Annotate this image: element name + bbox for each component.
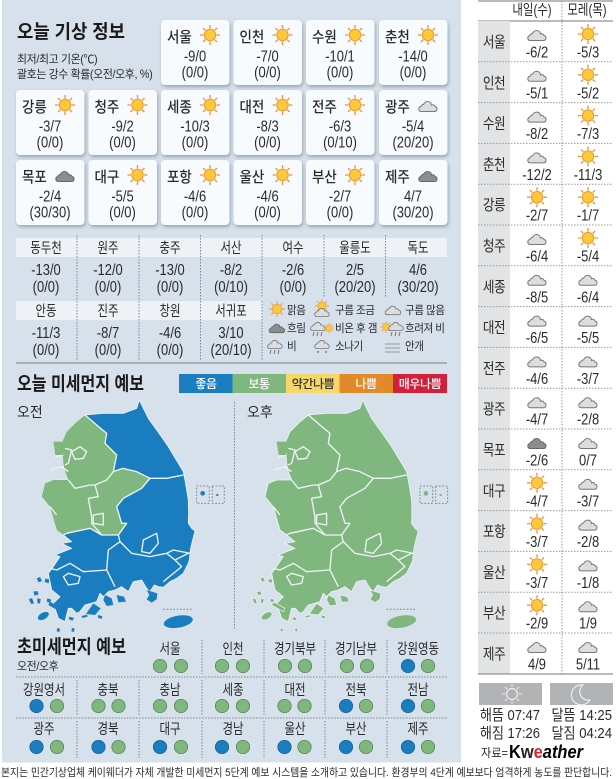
card: Chuncheon: [379, 20, 448, 85]
card: Seoul: [161, 20, 230, 85]
grid: ultrafine dust by region: 대구: [159, 721, 181, 737]
card: Gwangju: [379, 90, 448, 155]
card: Gangneung: [16, 90, 84, 155]
table: other cities weather: 서산: [220, 240, 242, 256]
card: Mokpo: -2/4: [39, 188, 61, 206]
panel: today's weather background: [2, 0, 461, 762]
row: Incheon: 인천: [483, 74, 505, 91]
row: Ulsan: [483, 554, 599, 592]
table: other cities weather: (20/10): [210, 342, 252, 359]
table: other cities weather: 울릉도: [339, 240, 371, 256]
panel: two-day forecast: 내일(수): [512, 2, 552, 18]
text block: legend note: 최저/최고 기온(℃): [17, 53, 98, 66]
card: Chuncheon: -14/0: [398, 48, 428, 66]
table: other cities weather: -13/0: [155, 262, 185, 279]
row: Gwangju: [483, 398, 599, 429]
grid: ultrafine dust by region: [16, 640, 447, 758]
row: Daegu: 대구: [483, 482, 505, 499]
table: other cities weather: (30/20): [397, 279, 439, 296]
table: other cities weather: (0/0): [33, 342, 59, 359]
row: Daegu: [483, 473, 599, 511]
table: other cities weather: 4/6: [409, 262, 427, 279]
row: Jeju: 4/9: [528, 656, 546, 674]
row: Daegu: -4/7: [526, 493, 548, 511]
table: other cities weather: 진주: [97, 303, 119, 319]
card: Ulsan: (0/0): [254, 204, 281, 222]
grid: ultrafine dust by region: 서울: [159, 641, 181, 657]
row: Busan: -2/9: [526, 616, 548, 633]
card: Chuncheon: 춘천: [385, 28, 410, 46]
table: other cities weather: 창원: [159, 303, 181, 319]
card: Ulsan: -4/6: [256, 188, 279, 206]
card: Busan: -2/7: [329, 188, 351, 206]
heading: ultrafine dust forecast: [17, 636, 126, 673]
row: Suwon: 수원: [483, 115, 505, 132]
legend: weather icons: 맑음: [287, 304, 306, 317]
card: Sejong: [161, 90, 230, 155]
card: Gwangju: 광주: [385, 98, 410, 116]
table: other cities weather: -8/2: [220, 262, 242, 279]
legend: weather icons: 구름 많음: [405, 304, 445, 317]
text block: legend note: [17, 53, 153, 81]
row: Suwon: -8/2: [526, 126, 548, 143]
legend: weather icons: 안개: [405, 340, 424, 353]
row: Seoul: [483, 24, 599, 62]
map: morning fine dust: [29, 400, 224, 632]
grid: ultrafine dust by region: 대전: [284, 682, 306, 698]
text: sun and moon times: 해짐 17:26: [480, 725, 540, 742]
row: Gwangju: -4/7: [526, 412, 548, 429]
row: Chuncheon: [483, 146, 602, 184]
legend: weather icons: [268, 299, 445, 354]
row: Cheongju: 청주: [483, 237, 505, 254]
card: Gangneung: -3/7: [39, 118, 61, 136]
map: afternoon fine dust: [252, 400, 448, 632]
card: Ulsan: 울산: [240, 168, 264, 186]
heading: ultrafine dust forecast: 오전/오후: [17, 660, 58, 673]
table: other cities weather: (0/0): [157, 342, 183, 359]
card: Daejeon: 대전: [240, 98, 264, 116]
row: Gangneung: -1/7: [577, 208, 599, 225]
table: other cities weather: (0/0): [95, 342, 121, 359]
card: Jeonju: 전주: [312, 98, 337, 116]
card: Daejeon: -8/3: [256, 118, 279, 136]
row: Suwon: [483, 106, 599, 143]
grid: ultrafine dust by region: 경북: [97, 721, 119, 737]
row: Sejong: -8/5: [526, 289, 548, 307]
row: Jeju: 제주: [483, 645, 505, 662]
row: Gangneung: 강릉: [483, 196, 506, 213]
grid: ultrafine dust by region: 경기북부: [274, 641, 316, 657]
row: Mokpo: -2/6: [526, 452, 548, 470]
card: Mokpo: (30/30): [29, 204, 71, 222]
table: other cities weather: 동두천: [30, 240, 62, 256]
card: Gangneung: 강릉: [22, 98, 47, 116]
card: Busan: [306, 160, 374, 225]
row: Mokpo: [483, 439, 597, 470]
card: Busan: 부산: [312, 168, 337, 186]
row: Pohang: [483, 514, 599, 551]
card: Suwon: [306, 20, 374, 85]
table: other cities weather: 서귀포: [215, 303, 247, 319]
card: Pohang: [161, 160, 230, 225]
legend: weather icons: 소나기: [335, 340, 363, 353]
card: Daegu: (0/0): [109, 204, 136, 222]
row: Incheon: [483, 65, 599, 103]
card: Jeju: 제주: [385, 168, 410, 186]
grid: ultrafine dust by region: 제주: [407, 721, 429, 737]
row: Cheongju: [483, 228, 599, 266]
row: Mokpo: 0/7: [579, 452, 597, 470]
icon: moon box: [550, 683, 613, 705]
legend: dust levels: 약간나쁨: [292, 377, 335, 391]
card: Seoul: 서울: [167, 28, 192, 46]
card: Cheongju: (0/0): [109, 134, 136, 152]
legend: weather icons: 구름 조금: [335, 304, 375, 317]
row: Pohang: -2/8: [577, 534, 599, 551]
row: Seoul: -6/2: [526, 44, 548, 62]
icon: sun box: [479, 683, 542, 705]
card: Seoul: -9/0: [184, 48, 206, 66]
table: other cities weather: -2/6: [282, 262, 304, 279]
source: Kweather: 자료=: [481, 746, 508, 760]
table: other cities weather: 안동: [35, 303, 57, 319]
legend: weather icons: 흐림: [287, 322, 306, 335]
panel: two-day forecast: 모레(목): [567, 2, 607, 18]
row: Ulsan: -1/8: [577, 575, 599, 592]
table: other cities weather: -4/6: [159, 325, 181, 342]
heading: fine dust forecast: 오늘 미세먼지 예보: [17, 373, 144, 395]
legend: dust levels: 보통: [248, 377, 270, 391]
table: other cities weather: 충주: [159, 240, 181, 256]
row: Ulsan: -3/7: [526, 575, 548, 592]
legend: dust levels: 나쁨: [355, 377, 377, 391]
card: Cheongju: -9/2: [111, 118, 134, 136]
table: other cities weather: -12/0: [93, 262, 123, 279]
row: Jeju: 5/11: [576, 656, 600, 674]
row: Chuncheon: -12/2: [522, 167, 552, 184]
text: sun and moon times: [480, 707, 612, 742]
row: Seoul: 서울: [483, 33, 505, 50]
row: Busan: [483, 595, 597, 633]
grid: ultrafine dust by region: 충남: [159, 682, 181, 698]
card: Incheon: -7/0: [256, 48, 279, 66]
card: Ulsan: [234, 160, 302, 225]
row: Incheon: -5/2: [577, 85, 599, 103]
card: Chuncheon: (0/0): [400, 64, 426, 82]
label: morning: 오전: [17, 404, 43, 420]
legend: weather icons: 흐려져 비: [405, 322, 445, 335]
legend: dust levels: [179, 374, 447, 393]
row: Chuncheon: -11/3: [574, 167, 602, 184]
card: Daegu: 대구: [95, 168, 119, 186]
row: Jeonju: -3/7: [577, 371, 599, 388]
card: Jeju: [379, 160, 448, 225]
card: Daejeon: (0/0): [254, 134, 281, 152]
row: Daejeon: [483, 316, 599, 347]
text: sun and moon times: 해뜸 07:47: [480, 707, 540, 724]
grid: ultrafine dust by region: 전남: [407, 682, 429, 698]
table: other cities weather: -13/0: [31, 262, 61, 279]
card: Incheon: 인천: [240, 28, 264, 46]
table: other cities weather: 2/5: [346, 262, 364, 279]
row: Sejong: [483, 275, 599, 307]
row: Gwangju: 광주: [483, 400, 505, 417]
row: Daejeon: -5/5: [577, 330, 599, 347]
card: Pohang: 포항: [167, 168, 192, 186]
grid: ultrafine dust by region: 세종: [222, 682, 244, 698]
grid: ultrafine dust by region: 강원영서: [23, 682, 65, 698]
row: Busan: 부산: [483, 604, 506, 621]
row: Mokpo: 목포: [483, 441, 506, 458]
row: Daegu: -3/7: [577, 493, 599, 511]
card: Daejeon: [234, 90, 302, 155]
text block: legend note: 괄호는 강수 확률(오전/오후, %): [17, 68, 153, 81]
card: Sejong: (0/0): [182, 134, 208, 152]
card: Mokpo: 목포: [22, 169, 47, 186]
grid: ultrafine dust by region: 경남: [222, 721, 244, 737]
row: Jeju: [483, 643, 600, 674]
row: Sejong: -6/4: [577, 289, 599, 307]
grid: ultrafine dust by region: 인천: [222, 641, 244, 657]
table: other cities weather: (0/10): [214, 279, 248, 296]
grid: ultrafine dust by region: 광주: [33, 721, 55, 737]
card: Incheon: (0/0): [254, 64, 281, 82]
table: other cities weather: [16, 235, 447, 361]
row: Sejong: 세종: [483, 278, 505, 295]
row: Pohang: 포항: [483, 523, 506, 540]
source: Kweather: Kweather: [509, 742, 584, 762]
table: other cities weather: 3/10: [218, 325, 244, 342]
card: Jeonju: -6/3: [329, 118, 351, 136]
card: Jeonju: (0/10): [323, 134, 357, 152]
row: Incheon: -5/1: [526, 85, 548, 103]
row: Jeonju: 전주: [483, 359, 505, 377]
row: Gangneung: -2/7: [526, 208, 548, 225]
card: Sejong: 세종: [167, 98, 192, 116]
panel: two-day forecast: [478, 1, 613, 674]
card: Jeju: 4/7: [404, 188, 422, 206]
row: Busan: 1/9: [579, 616, 597, 633]
row: Ulsan: 울산: [483, 563, 506, 581]
table: other cities weather: 독도: [407, 240, 429, 256]
row: Suwon: -7/3: [577, 126, 599, 143]
card: Jeju: (30/20): [392, 204, 434, 222]
row: Daejeon: 대전: [483, 319, 505, 336]
table: other cities weather: -11/3: [32, 325, 60, 342]
table: other cities weather: (0/0): [280, 279, 306, 296]
legend: dust levels: 매우나쁨: [399, 377, 442, 391]
legend: dust levels: 좋음: [195, 377, 217, 391]
table: other cities weather: 원주: [97, 240, 119, 256]
row: Gwangju: -2/8: [577, 412, 599, 429]
table: other cities weather: 여수: [282, 240, 304, 256]
table: other cities weather: (20/20): [334, 279, 376, 296]
table: other cities weather: (0/0): [33, 279, 59, 296]
grid: ultrafine dust by region: 경기남부: [335, 641, 377, 657]
table: other cities weather: -8/7: [97, 325, 119, 342]
heading: ultrafine dust forecast: 초미세먼지 예보: [17, 636, 126, 658]
title: today's weather info: 오늘 기상 정보: [17, 21, 125, 43]
label: afternoon: 오후: [247, 404, 273, 420]
card: Sejong: -10/3: [180, 118, 210, 136]
card: Pohang: (0/0): [182, 204, 208, 222]
card: Suwon: (0/0): [327, 64, 353, 82]
card: Daegu: [88, 160, 157, 225]
grid: ultrafine dust by region: 부산: [345, 721, 367, 737]
grid: ultrafine dust by region: 전북: [345, 682, 367, 698]
row: Jeonju: [483, 357, 599, 388]
row: Cheongju: -6/4: [526, 248, 548, 266]
card: Busan: (0/0): [327, 204, 353, 222]
row: Chuncheon: 춘천: [483, 155, 505, 173]
row: Seoul: -5/3: [577, 44, 599, 62]
card: Suwon: -10/1: [325, 48, 355, 66]
row: Cheongju: -5/4: [577, 248, 599, 266]
row: Gangneung: [483, 187, 599, 225]
grid: ultrafine dust by region: 강원영동: [397, 641, 439, 657]
card: Cheongju: 청주: [95, 98, 119, 116]
row: Daejeon: -6/5: [526, 330, 548, 347]
grid: ultrafine dust by region: 충북: [97, 682, 119, 698]
card: Incheon: [234, 20, 302, 85]
card: Seoul: (0/0): [182, 64, 208, 82]
card: Gwangju: -5/4: [402, 118, 424, 136]
table: other cities weather: (0/0): [95, 279, 121, 296]
legend: weather icons: 비: [287, 340, 296, 353]
legend: weather icons: 비온 후 갬: [335, 322, 377, 335]
card: Gangneung: (0/0): [37, 134, 63, 152]
card: Mokpo: [16, 160, 84, 225]
grid: ultrafine dust by region: 울산: [284, 721, 306, 737]
card: Jeonju: [306, 90, 374, 155]
card: Cheongju: [88, 90, 157, 155]
row: Jeonju: -4/6: [526, 371, 548, 388]
card: Gwangju: (20/20): [392, 134, 434, 152]
row: Pohang: -3/7: [526, 534, 548, 551]
card: Pohang: -4/6: [184, 188, 206, 206]
card: Daegu: -5/5: [111, 188, 134, 206]
card: Suwon: 수원: [312, 28, 337, 46]
table: other cities weather: (0/0): [157, 279, 183, 296]
